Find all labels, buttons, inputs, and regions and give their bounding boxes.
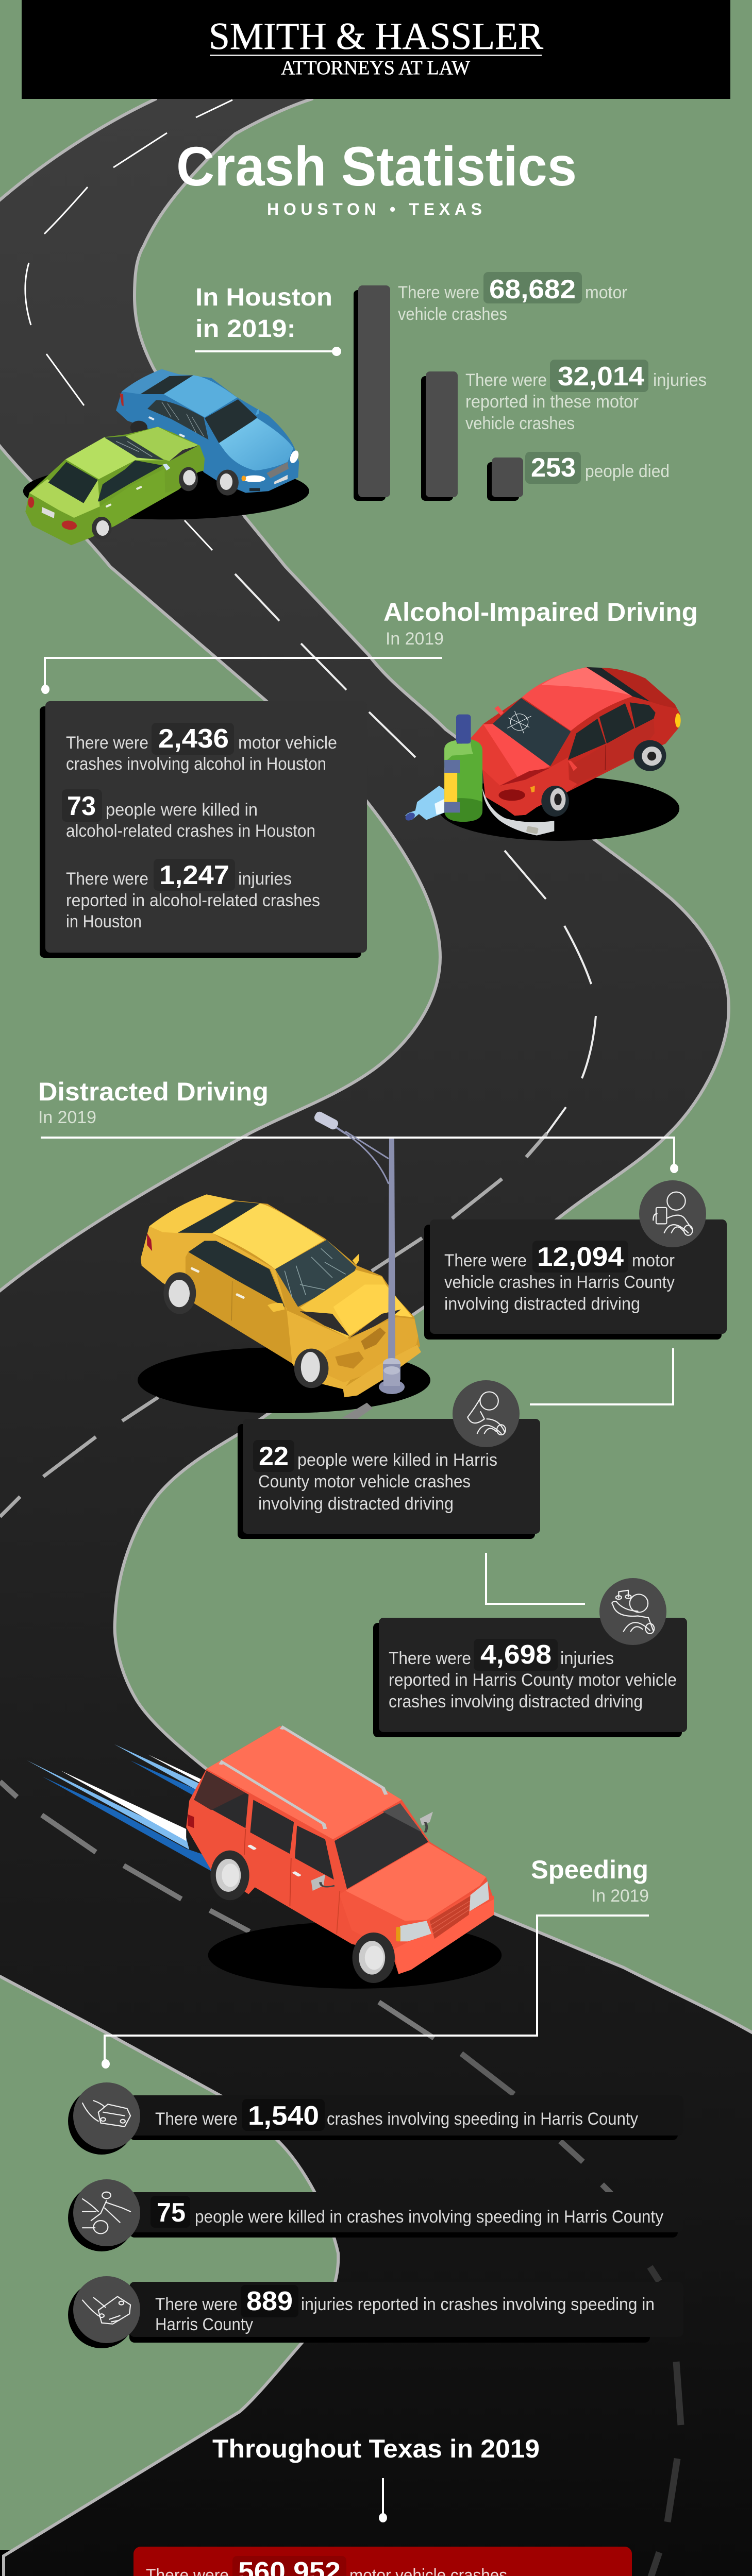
stat: 32,014 injuries: injuries <box>653 370 707 390</box>
panel: alcohol statistics <box>40 701 367 958</box>
stat: 253 deaths <box>525 452 670 484</box>
row: 1,540 speeding crashes: crashes involving speeding in Harris County <box>327 2109 638 2129</box>
icon: skidding car <box>73 2082 140 2149</box>
bar: 560,952 Texas crashes <box>133 2547 632 2576</box>
connector: speeding heading to rows <box>102 1916 649 2069</box>
heading: Alcohol-Impaired Driving <box>383 598 698 649</box>
row: 75 killed speeding: 75 <box>157 2198 186 2228</box>
stat: 68,682 crashes: vehicle crashes <box>398 304 507 324</box>
stat: 1,247 injuries: in Houston <box>66 912 142 931</box>
water bottle <box>404 786 445 822</box>
panel: 4,698 injuries distracted <box>373 1578 687 1737</box>
connector: first to second distracted panel <box>530 1348 673 1404</box>
icon: overturned car <box>73 2276 140 2343</box>
icon: pedestrian struck <box>73 2179 140 2246</box>
green car <box>25 427 205 545</box>
heading: Speeding: Speeding <box>531 1855 648 1884</box>
lower black background <box>0 2550 752 2576</box>
heading: In Houston in 2019 <box>195 284 341 356</box>
panel: 22 killed distracted: 22 <box>259 1442 289 1471</box>
row: 889 injuries speeding: injuries reported in crashes involving speeding in <box>301 2295 655 2314</box>
heading: Distracted Driving: Distracted Driving <box>38 1077 269 1106</box>
panel: 4,698 injuries distracted: 4,698 <box>480 1640 552 1670</box>
header bar with logo: SMITH & HASSLER <box>209 15 544 58</box>
green bottle <box>444 715 482 822</box>
stat: 32,014 injuries <box>465 360 707 433</box>
stat: 253 deaths: 253 <box>531 453 576 483</box>
stat: 73 killed: 73 <box>67 791 96 821</box>
connector: second to third distracted panel <box>486 1553 585 1604</box>
panel: 22 killed distracted: involving distracted driving <box>258 1494 454 1514</box>
connector: alcohol heading to panel <box>41 658 442 694</box>
heading: In Houston in 2019: in 2019: <box>195 315 296 343</box>
stat: 32,014 injuries: 32,014 <box>558 362 644 392</box>
SUV body <box>186 1726 494 1983</box>
panel: 12,094 distracted crashes: There were <box>444 1251 527 1270</box>
panel: 12,094 distracted crashes: involving distracted driving <box>444 1294 640 1314</box>
panel: 4,698 injuries distracted: reported in Harris County motor vehicle <box>389 1670 677 1690</box>
lamp post <box>313 1110 405 1394</box>
heading: Distracted Driving: In 2019 <box>38 1108 96 1127</box>
bar chart: Houston crashes, injuries, deaths <box>354 285 523 501</box>
connector: Texas heading down <box>379 2478 387 2522</box>
stat: 68,682 crashes: There were <box>398 283 479 302</box>
debris: bumper pieces <box>342 1345 421 1419</box>
panel: 12,094 distracted crashes: 12,094 <box>537 1242 624 1272</box>
stat: 2,436 alcohol crashes <box>66 723 337 774</box>
stat: 253 deaths: people died <box>585 462 670 481</box>
stat: 32,014 injuries: There were <box>465 370 547 390</box>
blue car <box>116 369 300 496</box>
stat: 2,436 alcohol crashes: crashes involving alcohol in Houston <box>66 754 326 774</box>
row: 889 injuries speeding: There were <box>155 2295 238 2314</box>
heading: Distracted Driving <box>38 1077 269 1127</box>
speed streaks <box>27 1744 214 1871</box>
icon: driver holding phone <box>639 1180 706 1247</box>
panel: 4,698 injuries distracted: crashes involving distracted driving <box>389 1692 643 1711</box>
heading: In Houston in 2019: In Houston <box>195 284 332 311</box>
stat: 2,436 alcohol crashes: motor vehicle <box>238 733 337 753</box>
stat: 68,682 crashes <box>398 272 627 324</box>
connector: distracted heading to first panel <box>41 1138 678 1173</box>
stat: 1,247 injuries: reported in alcohol-related crashes <box>66 891 320 910</box>
heading: Alcohol-Impaired Driving: In 2019 <box>386 629 444 649</box>
panel: 4,698 injuries distracted: There were <box>389 1649 471 1668</box>
row: 75 killed speeding <box>68 2179 683 2251</box>
panel: 12,094 distracted crashes <box>424 1180 727 1340</box>
header bar with logo: ATTORNEYS AT LAW <box>281 57 470 79</box>
stat: 1,247 injuries: injuries <box>238 869 292 889</box>
panel: 12,094 distracted crashes: vehicle crashes in Harris County <box>444 1273 675 1292</box>
icon: driver on phone call <box>453 1380 520 1447</box>
header bar with logo <box>22 0 730 99</box>
red car <box>471 667 681 836</box>
row: 1,540 speeding crashes: 1,540 <box>248 2101 319 2131</box>
row: 889 injuries speeding <box>68 2276 683 2348</box>
stat: 1,247 injuries <box>66 859 320 931</box>
illustration: red car and bottle <box>404 667 681 841</box>
panel: 22 killed distracted: people were killed in Harris <box>297 1450 497 1470</box>
row: 1,540 speeding crashes <box>68 2082 683 2155</box>
stat: 68,682 crashes: 68,682 <box>489 275 576 304</box>
stat: 2,436 alcohol crashes: 2,436 <box>158 724 229 754</box>
heading: Speeding: In 2019 <box>591 1886 649 1906</box>
row: 1,540 speeding crashes: There were <box>155 2109 238 2129</box>
panel: 22 killed distracted <box>238 1380 540 1539</box>
stat: 1,247 injuries: There were <box>66 869 148 889</box>
heading: Speeding <box>531 1855 649 1906</box>
illustration: blue and green cars crashed <box>23 369 309 545</box>
illustration: yellow car against lamp post <box>138 1110 430 1419</box>
stat: 32,014 injuries: reported in these motor <box>465 392 639 412</box>
row: 889 injuries speeding: 889 <box>246 2286 293 2316</box>
stat: 68,682 crashes: motor <box>585 283 627 302</box>
icon: driver listening to music <box>599 1578 666 1645</box>
stat: 32,014 injuries: vehicle crashes <box>465 414 575 433</box>
stat: 73 killed: people were killed in <box>106 800 258 820</box>
title: HOUSTON • TEXAS <box>267 200 482 218</box>
heading: Alcohol-Impaired Driving: Alcohol-Impaired Driving <box>383 598 698 626</box>
illustration: speeding red SUV <box>27 1726 502 1989</box>
stat: 1,247 injuries: 1,247 <box>159 860 229 890</box>
panel: 22 killed distracted: County motor vehicle crashes <box>258 1472 471 1492</box>
yellow car <box>141 1194 420 1389</box>
row: 75 killed speeding: people were killed in crashes involving speeding in Harris County <box>195 2207 663 2227</box>
panel: 12,094 distracted crashes: motor <box>632 1251 675 1270</box>
stat: 73 killed <box>62 789 315 841</box>
title: Crash Statistics <box>176 135 577 197</box>
stat: 73 killed: alcohol-related crashes in Houston <box>66 821 315 841</box>
stat: 2,436 alcohol crashes: There were <box>66 733 148 753</box>
row: 889 injuries speeding: Harris County <box>155 2315 253 2334</box>
panel: 4,698 injuries distracted: injuries <box>560 1649 614 1668</box>
heading: Throughout Texas in 2019: Throughout Texas in 2019 <box>212 2434 540 2463</box>
